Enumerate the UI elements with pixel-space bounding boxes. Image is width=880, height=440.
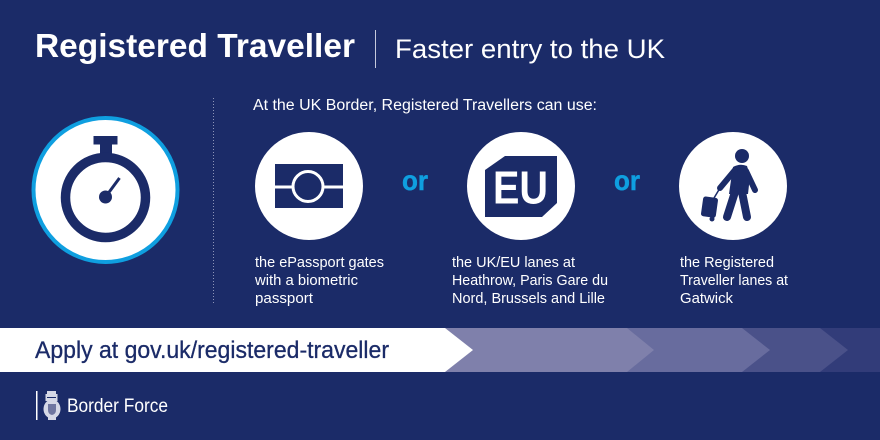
call to action: Apply at gov.uk/registered-traveller bbox=[35, 337, 389, 364]
icon: EU lane sign bbox=[467, 132, 575, 240]
caption: ePassport gates bbox=[254, 255, 384, 307]
caption: UK/EU lanes: Heathrow, Paris Gare du bbox=[452, 273, 608, 289]
arrow band bbox=[0, 328, 880, 372]
caption: Registered Traveller lanes: Gatwick bbox=[680, 291, 734, 307]
or separator 1: or bbox=[402, 165, 428, 196]
icon: EU lane sign: EU bbox=[493, 162, 548, 214]
caption: UK/EU lanes: Nord, Brussels and Lille bbox=[452, 291, 605, 307]
icon: ePassport gate bbox=[255, 132, 363, 240]
icon: traveller with suitcase bbox=[679, 132, 787, 240]
or separator 2: or bbox=[614, 165, 640, 196]
title: Registered Traveller bbox=[35, 27, 355, 64]
caption: Registered Traveller lanes bbox=[680, 255, 788, 307]
caption: Registered Traveller lanes: Traveller lanes at bbox=[680, 273, 788, 289]
icon: royal crest bbox=[44, 391, 60, 420]
logo: Border Force bbox=[36, 391, 168, 420]
caption: Registered Traveller lanes: the Registered bbox=[680, 255, 774, 271]
subtitle: Faster entry to the UK bbox=[395, 34, 665, 64]
caption: ePassport gates: passport bbox=[255, 291, 313, 307]
caption: UK/EU lanes: the UK/EU lanes at bbox=[452, 255, 575, 271]
logo: Border Force: Border Force bbox=[67, 396, 168, 417]
caption: ePassport gates: with a biometric bbox=[254, 273, 358, 289]
caption: UK/EU lanes bbox=[452, 255, 608, 307]
caption: ePassport gates: the ePassport gates bbox=[255, 255, 384, 271]
icon: stopwatch bbox=[34, 118, 178, 262]
intro text: At the UK Border, Registered Travellers can use: bbox=[253, 97, 597, 114]
